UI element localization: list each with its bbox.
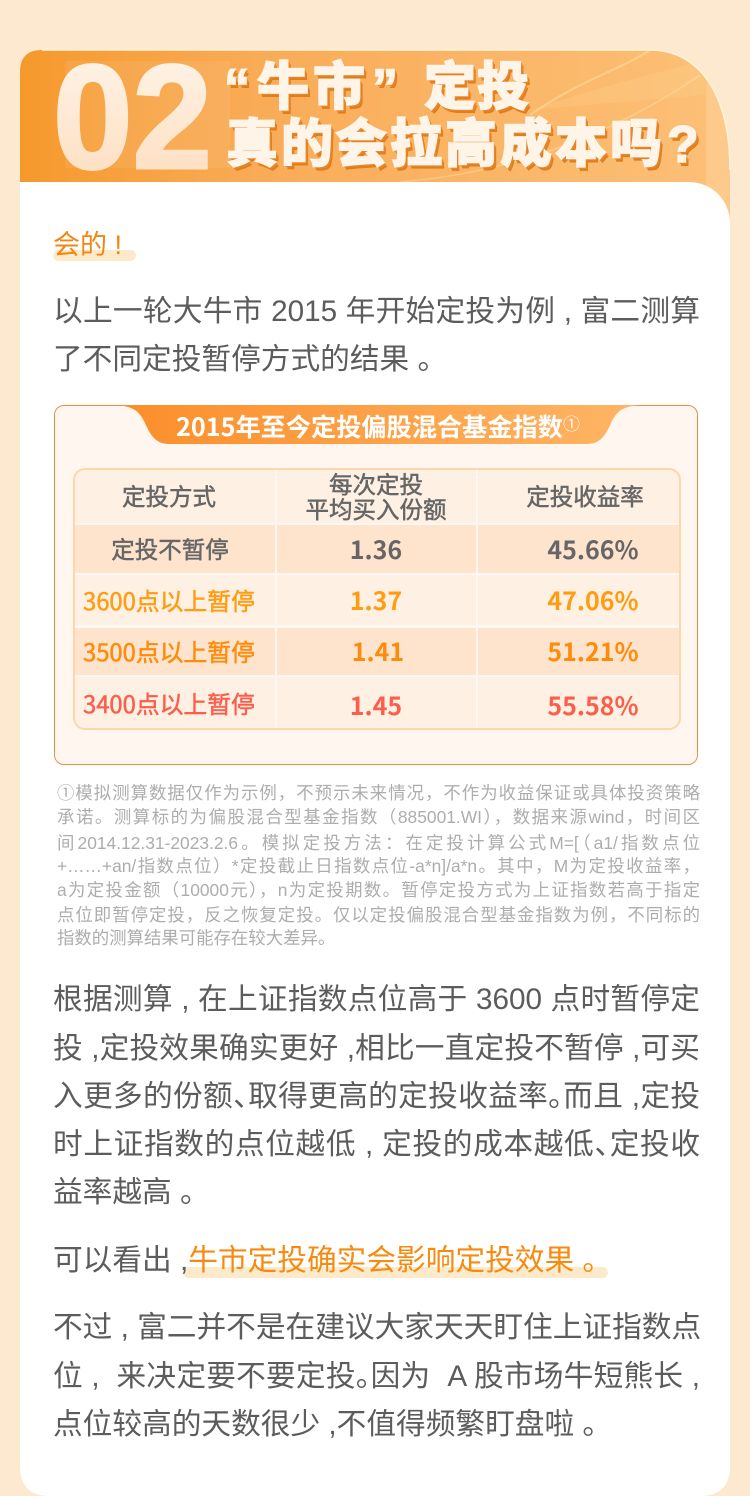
intro paragraph <box>53 295 700 376</box>
row divider <box>75 523 679 525</box>
footnote: ①模拟测算数据仅作为示例，不预示未来情况，不作为收益保证或具体投资策略 <box>57 783 700 803</box>
title line 1: 牛 <box>257 59 309 117</box>
row: 3400点以上暂停: 1.45 <box>350 687 402 723</box>
answer text: 会的 ! <box>53 230 122 260</box>
row: 3600点以上暂停 <box>83 582 639 618</box>
table <box>73 468 681 730</box>
paragraph: caveat: 位 , 来决定要不要定投。因为 A 股市场牛短熊长 , <box>53 1360 700 1393</box>
row: 定投不暂停: 45.66% <box>547 531 639 567</box>
intro paragraph: 了不同定投暂停方式的结果 。 <box>53 343 447 376</box>
title line 2: 的 <box>281 116 333 174</box>
paragraph: caveat <box>53 1311 701 1441</box>
title line 2: 成 <box>500 116 552 174</box>
title line 1: ” <box>372 59 398 117</box>
row divider <box>75 573 679 575</box>
row stripe: 3500点 <box>75 626 679 676</box>
footnote: 指数的测算结果可能存在较大差异。 <box>57 928 335 948</box>
row: 3600点以上暂停: 3600点以上暂停 <box>83 582 255 617</box>
paragraph: results: 益率越高 。 <box>53 1176 210 1209</box>
title line 2: 高 <box>445 116 497 174</box>
row: 3500点以上暂停: 1.41 <box>352 633 404 669</box>
header: 平均买入份额 <box>306 468 446 524</box>
paragraph: results: 时上证指数的点位越低 , 定投的成本越低、定投收 <box>53 1128 700 1161</box>
column divider 1 <box>275 470 277 728</box>
footnote: +……+an/指数点位）*定投截止日指数点位-a*n]/a*n。其中，M为定投收益率， <box>57 856 700 876</box>
row: 定投不暂停 <box>111 531 639 567</box>
row: 3600点以上暂停: 1.37 <box>350 582 402 618</box>
title line 2: 本 <box>555 116 607 174</box>
column divider 2 <box>476 470 478 728</box>
paragraph: results: 根据测算 , 在上证指数点位高于 3600 点时暂停定 <box>53 983 700 1016</box>
footnote: 点位即暂停定投，反之恢复定投。仅以定投偏股混合型基金指数为例，不同标的 <box>57 905 700 925</box>
row stripe: 定投不暂停 <box>75 524 679 573</box>
highlight: conclusion underline <box>183 1267 608 1278</box>
title line 1: 定 <box>424 59 476 117</box>
row divider <box>75 625 679 628</box>
title line 1 <box>224 58 531 117</box>
card bottom corners <box>20 1469 730 1496</box>
row: 3400点以上暂停 <box>83 685 639 723</box>
paragraph: results: 投 ,定投效果确实更好 ,相比一直定投不暂停 ,可买 <box>53 1032 700 1065</box>
row: 3600点以上暂停: 47.06% <box>547 582 639 618</box>
paragraph: results: 入更多的份额、取得更高的定投收益率。而且 ,定投 <box>53 1080 700 1113</box>
panel: data table card <box>54 405 698 765</box>
title line 2: 吗 <box>610 116 662 174</box>
paragraph: caveat: 点位较高的天数很少 ,不值得频繁盯盘啦 。 <box>53 1408 612 1441</box>
intro paragraph: 以上一轮大牛市 2015 年开始定投为例 , 富二测算 <box>53 295 700 328</box>
header: 定投方式: 定投方式 <box>122 478 216 512</box>
title line 2: 会 <box>335 116 387 174</box>
row: 定投不暂停: 定投不暂停 <box>111 531 229 565</box>
title line 1: 市 <box>313 59 365 117</box>
footnote: 间2014.12.31-2023.2.6。模拟定投方法：在定投计算公式M=[（a1/指数点位 <box>57 833 700 853</box>
row: 3500点以上暂停: 51.21% <box>547 633 639 669</box>
banner: table title: 2015年至今定投偏股混合基金指数① <box>176 408 580 444</box>
title line 1: “ <box>224 59 250 117</box>
big number 02: 02 <box>53 35 212 200</box>
header: 平均买入份额: 平均买入份额 <box>306 490 446 524</box>
title line 2 <box>226 115 699 174</box>
conclusion sentence: 可以看出 ,牛市定投确实会影响定投效果 。 <box>53 1244 612 1277</box>
row: 3500点以上暂停: 3500点以上暂停 <box>83 633 255 668</box>
row: 定投不暂停: 1.36 <box>350 531 402 567</box>
title line 2: ? <box>667 116 699 174</box>
title line 1: 投 <box>477 59 529 117</box>
row: 3400点以上暂停: 55.58% <box>547 687 639 723</box>
row: 3500点以上暂停 <box>83 633 639 669</box>
paragraph: results <box>53 983 700 1209</box>
highlight: answer underline <box>53 250 136 261</box>
paragraph: caveat: 不过 , 富二并不是在建议大家天天盯住上证指数点 <box>53 1311 701 1344</box>
title line 2: 拉 <box>390 116 442 174</box>
row divider <box>75 675 679 677</box>
header banner <box>20 35 730 222</box>
header: 定投收益率: 定投收益率 <box>526 478 644 512</box>
title line 2: 真 <box>226 116 278 174</box>
footnote: a为定投金额（10000元），n为定投期数。暂停定投方式为上证指数若高于指定 <box>57 880 700 900</box>
footnote <box>57 783 700 948</box>
row: 3400点以上暂停: 3400点以上暂停 <box>83 685 255 720</box>
footnote: 承诺。测算标的为偏股混合型基金指数（885001.WI），数据来源wind，时间区 <box>57 807 700 827</box>
